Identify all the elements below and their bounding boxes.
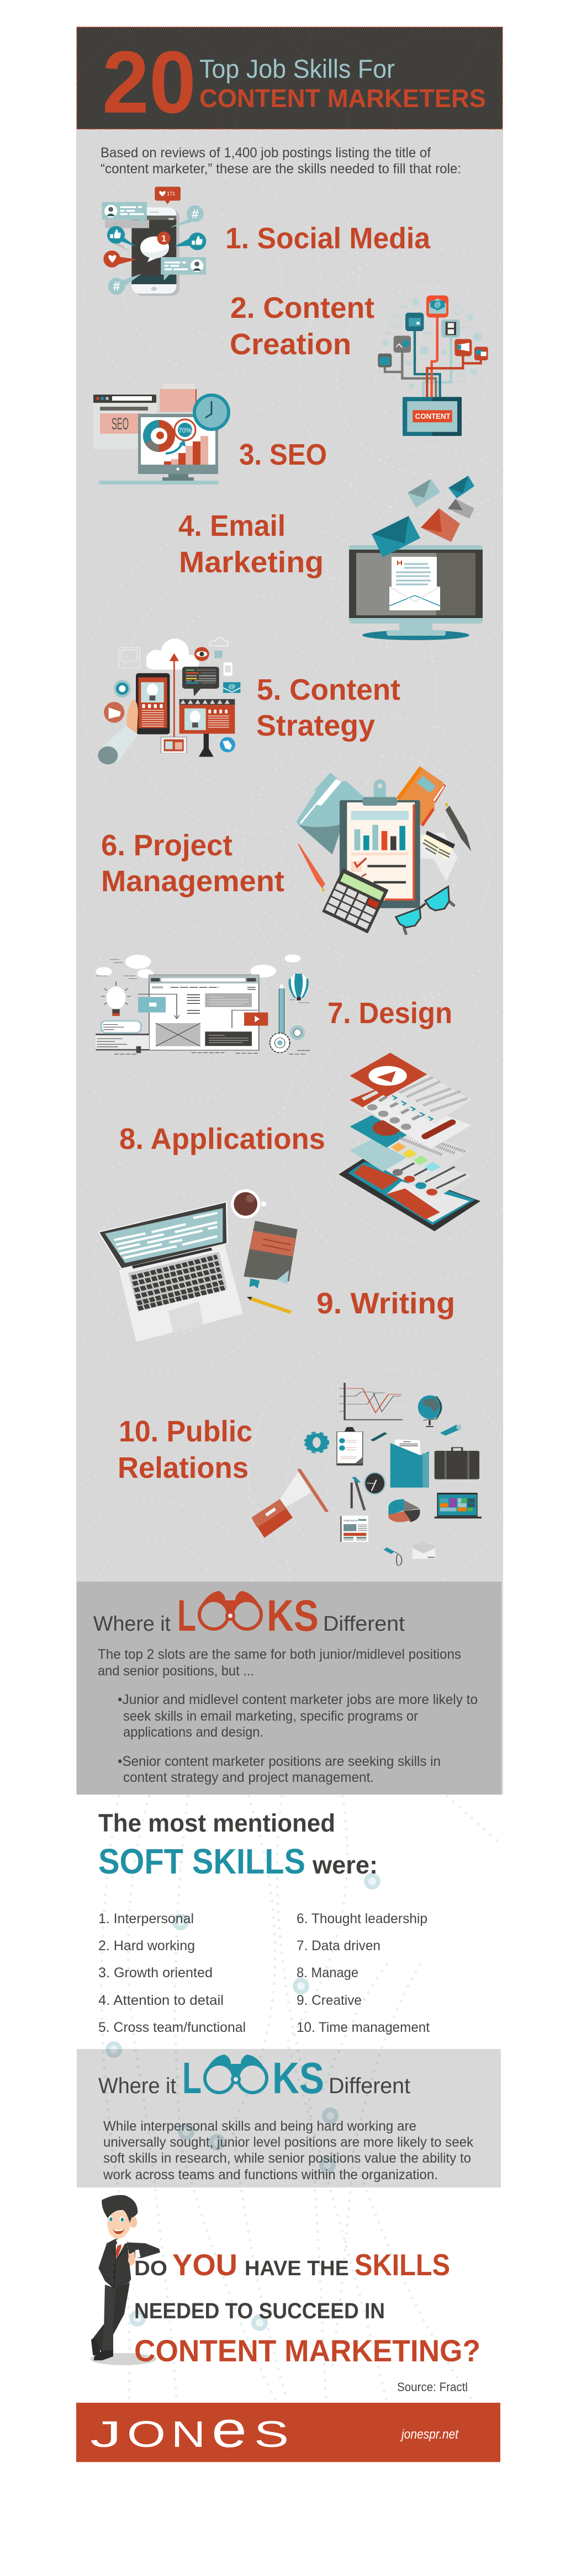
logo: Jones: e: [212, 2402, 247, 2458]
icon: writing laptop and notebook: [99, 1189, 298, 1342]
panel: where it looks different (junior vs senior): [77, 1582, 501, 1795]
icon: content creation tree: @: [434, 301, 441, 308]
icon: content creation tree: CONTENT: [415, 412, 451, 421]
logo: Jones: S: [254, 2414, 289, 2455]
heading: 8. Applications: 8. Applications: [119, 1122, 325, 1156]
title line 2: CONTENT MARKETERS: [199, 84, 486, 113]
icon: email monitor: [349, 476, 483, 640]
icon: content creation tree: [378, 295, 488, 436]
panel: title banner: [76, 26, 503, 130]
bullet: senior: [118, 1754, 441, 1785]
icon: public relations objects: 30: [339, 1396, 344, 1398]
logo: Jones: O: [127, 2414, 166, 2455]
website: jonespr.net: [400, 2427, 459, 2442]
heading: The most mentioned soft skills: [98, 1809, 378, 1881]
list: soft skills 1 to 5: 4. Attention to detail: [98, 1993, 224, 2008]
heading: Where it Looks Different: L: [182, 2053, 202, 2103]
intro text: Based on reviews of 1,400 job postings listing the title of: [101, 145, 431, 161]
heading: 4. Email Marketing: Marketing: [179, 546, 324, 579]
heading: Where it Looks Different: KS: [272, 2053, 324, 2103]
heading: Where it Looks Different: [93, 1591, 405, 1640]
footer band: [76, 2402, 500, 2462]
heading: 4. Email Marketing: [178, 509, 324, 579]
list: soft skills 1 to 5: 3. Growth oriented: [98, 1965, 213, 1981]
bullet: junior and midlevel: [118, 1692, 478, 1740]
list: soft skills 6 to 10: 10. Time management: [297, 2020, 430, 2035]
icon: content strategy: @: [228, 683, 236, 690]
heading: Where it Looks Different: Where it: [98, 2074, 176, 2098]
panel: where it looks different (soft skills): [77, 2049, 501, 2188]
background: dotted lines and rings on white section: [102, 1796, 500, 2401]
call to action: HAVE THE: [245, 2257, 349, 2280]
icon: content strategy: [98, 637, 240, 764]
icon: social media phone: #: [192, 206, 199, 221]
icon: public relations objects: [251, 1383, 482, 1566]
icon: social media phone: #: [113, 279, 120, 294]
heading: Where it Looks Different: KS: [267, 1591, 319, 1640]
heading: 10. Public Relations: 10. Public: [119, 1415, 252, 1448]
heading: Where it Looks Different: Different: [329, 2074, 410, 2098]
heading: Where it Looks Different: Different: [323, 1612, 405, 1636]
heading: The most mentioned soft skills: The most mentioned: [98, 1809, 335, 1837]
heading: 2. Content Creation: Creation: [230, 328, 351, 361]
call to action: SKILLS: [355, 2248, 450, 2282]
icon: SEO desktop: [93, 384, 230, 485]
icon: SEO desktop: SEO: [112, 415, 129, 433]
body text: universally sought, junior level positions are more likely to seek: [103, 2135, 473, 2150]
source note: Source: Fractl: [397, 2380, 468, 2394]
list: soft skills 6 to 10: 9. Creative: [297, 1993, 362, 2008]
heading: 2. Content Creation: 2. Content: [230, 291, 374, 324]
call to action: DO: [134, 2257, 167, 2280]
bullet: senior: content strategy and project management.: [123, 1770, 374, 1785]
logo: Jones: N: [171, 2414, 205, 2455]
panel: grey skills background: [76, 130, 503, 1795]
call to action: NEEDED TO SUCCEED IN: [134, 2299, 385, 2323]
heading: 6. Project Management: 6. Project: [101, 829, 232, 862]
body text: The top 2 slots are the same for both junior/midlevel positions: [98, 1647, 461, 1662]
heading: 5. Content Strategy: [256, 673, 400, 742]
title line 1: Top Job Skills For: [199, 54, 395, 83]
list: soft skills 1 to 5: 2. Hard working: [98, 1938, 195, 1954]
intro text: “content marketer,” these are the skills needed to fill that role:: [101, 161, 461, 177]
title number 20: 20: [102, 33, 196, 131]
bullet: junior and midlevel: •Junior and midlevel content marketer jobs are more likely to: [118, 1692, 478, 1707]
list: soft skills 1 to 5: 5. Cross team/functional: [98, 2020, 246, 2035]
bullet: junior and midlevel: applications and design.: [123, 1725, 263, 1740]
heading: 4. Email Marketing: 4. Email: [178, 509, 286, 542]
body text: and senior positions, but ...: [98, 1663, 254, 1679]
list: soft skills 1 to 5: 1. Interpersonal: [98, 1911, 194, 1926]
heading: 7. Design: 7. Design: [327, 997, 452, 1030]
intro text: [101, 145, 461, 177]
heading: 5. Content Strategy: 5. Content: [257, 673, 400, 706]
heading: 5. Content Strategy: Strategy: [256, 709, 375, 742]
list: soft skills 6 to 10: [297, 1911, 430, 2035]
list: soft skills 6 to 10: 8. Manage: [297, 1965, 358, 1981]
call to action: CONTENT MARKETING?: [134, 2333, 480, 2368]
icon: mobile applications layers: [339, 1053, 480, 1231]
body text: While interpersonal skills and being hard working are: [103, 2119, 416, 2134]
icon: public relations objects: 10: [339, 1411, 344, 1413]
logo: Jones: J: [90, 2414, 121, 2455]
heading: 1. Social Media: 1. Social Media: [225, 222, 431, 255]
icon: social media phone: 1: [161, 234, 166, 243]
icon: public relations objects: NEWS: [344, 1519, 358, 1522]
icon: project management clipboard: [297, 766, 471, 934]
heading: 2. Content Creation: [230, 291, 374, 361]
icon: SEO desktop: 70%: [178, 427, 192, 434]
icon: public relations objects: 20: [339, 1403, 344, 1405]
heading: Where it Looks Different: [98, 2053, 410, 2103]
heading: 6. Project Management: Management: [101, 865, 284, 898]
call to action: [134, 2248, 480, 2368]
heading: 3. SEO: 3. SEO: [239, 438, 327, 471]
list: soft skills 6 to 10: 6. Thought leadership: [297, 1911, 427, 1926]
heading: The most mentioned soft skills: were:: [312, 1851, 378, 1879]
icon: web design wireframe: [96, 955, 310, 1054]
heading: Where it Looks Different: Where it: [93, 1612, 171, 1636]
heading: The most mentioned soft skills: SOFT SKILLS: [98, 1841, 305, 1881]
heading: 10. Public Relations: Relations: [118, 1451, 249, 1484]
illustration: businessman: [90, 2195, 160, 2365]
heading: 9. Writing: 9. Writing: [316, 1287, 455, 1320]
icon: social media phone: [102, 187, 206, 296]
list: soft skills 1 to 5: [98, 1911, 246, 2035]
body text: work across teams and functions within the organization.: [103, 2167, 438, 2183]
icon: social media phone: 171: [167, 191, 175, 196]
body text: [98, 1647, 461, 1679]
body text: soft skills in research, while senior positions value the ability to: [103, 2151, 471, 2166]
heading: 10. Public Relations: [118, 1415, 252, 1484]
list: soft skills 6 to 10: 7. Data driven: [297, 1938, 381, 1954]
heading: 6. Project Management: [101, 829, 284, 898]
body text: [103, 2119, 473, 2183]
bullet: senior: •Senior content marketer positions are seeking skills in: [118, 1754, 441, 1769]
bullet: junior and midlevel: seek skills in email marketing, specific programs or: [123, 1709, 418, 1724]
call to action: YOU: [172, 2248, 237, 2282]
heading: Where it Looks Different: L: [177, 1591, 196, 1640]
icon: public relations objects: 40: [339, 1388, 344, 1390]
